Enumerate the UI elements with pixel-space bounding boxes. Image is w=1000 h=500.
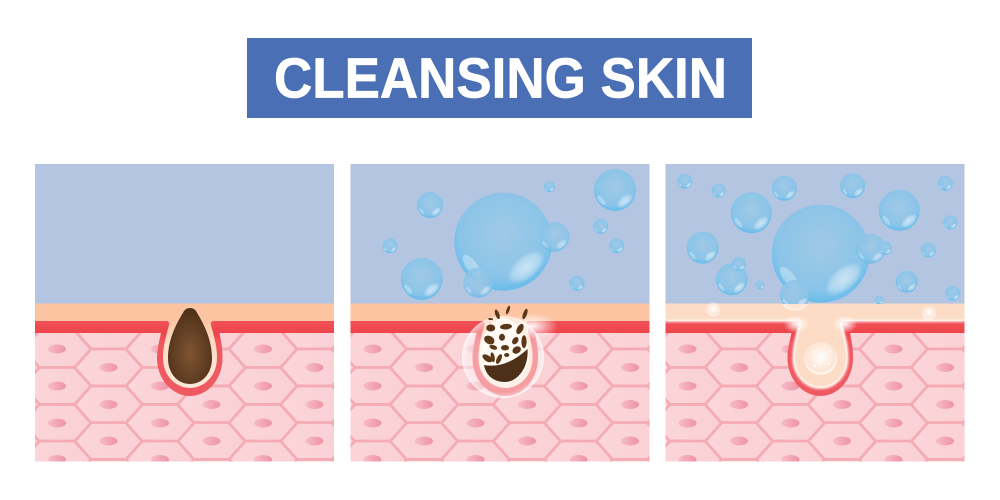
title text: CLEANSING SKIN bbox=[274, 46, 727, 110]
title banner bbox=[247, 38, 752, 118]
bubbles bbox=[678, 173, 960, 310]
bubbles bbox=[382, 169, 636, 300]
panel: bubbles breaking up plug bbox=[287, 164, 716, 496]
skin cells bbox=[0, 294, 400, 496]
icon: sebum fragments bbox=[481, 305, 529, 365]
glowing bubble around pore bbox=[462, 316, 544, 398]
pore lining bbox=[666, 315, 964, 396]
pore lining bbox=[350, 321, 650, 396]
icon: sebum plug bbox=[168, 308, 212, 384]
white bubbles on the skin surface bbox=[706, 302, 936, 320]
glow highlight bbox=[506, 313, 558, 339]
panel: clogged pore bbox=[0, 164, 400, 496]
skin cells bbox=[602, 294, 1000, 496]
egg shaped pore interior bbox=[480, 318, 529, 383]
sparkling sphere in pore bbox=[804, 342, 837, 375]
panel: clean pore bbox=[666, 164, 964, 462]
pore lining bbox=[35, 321, 334, 396]
icon: sebum bowl bbox=[484, 349, 528, 382]
skin cells bbox=[287, 294, 716, 496]
